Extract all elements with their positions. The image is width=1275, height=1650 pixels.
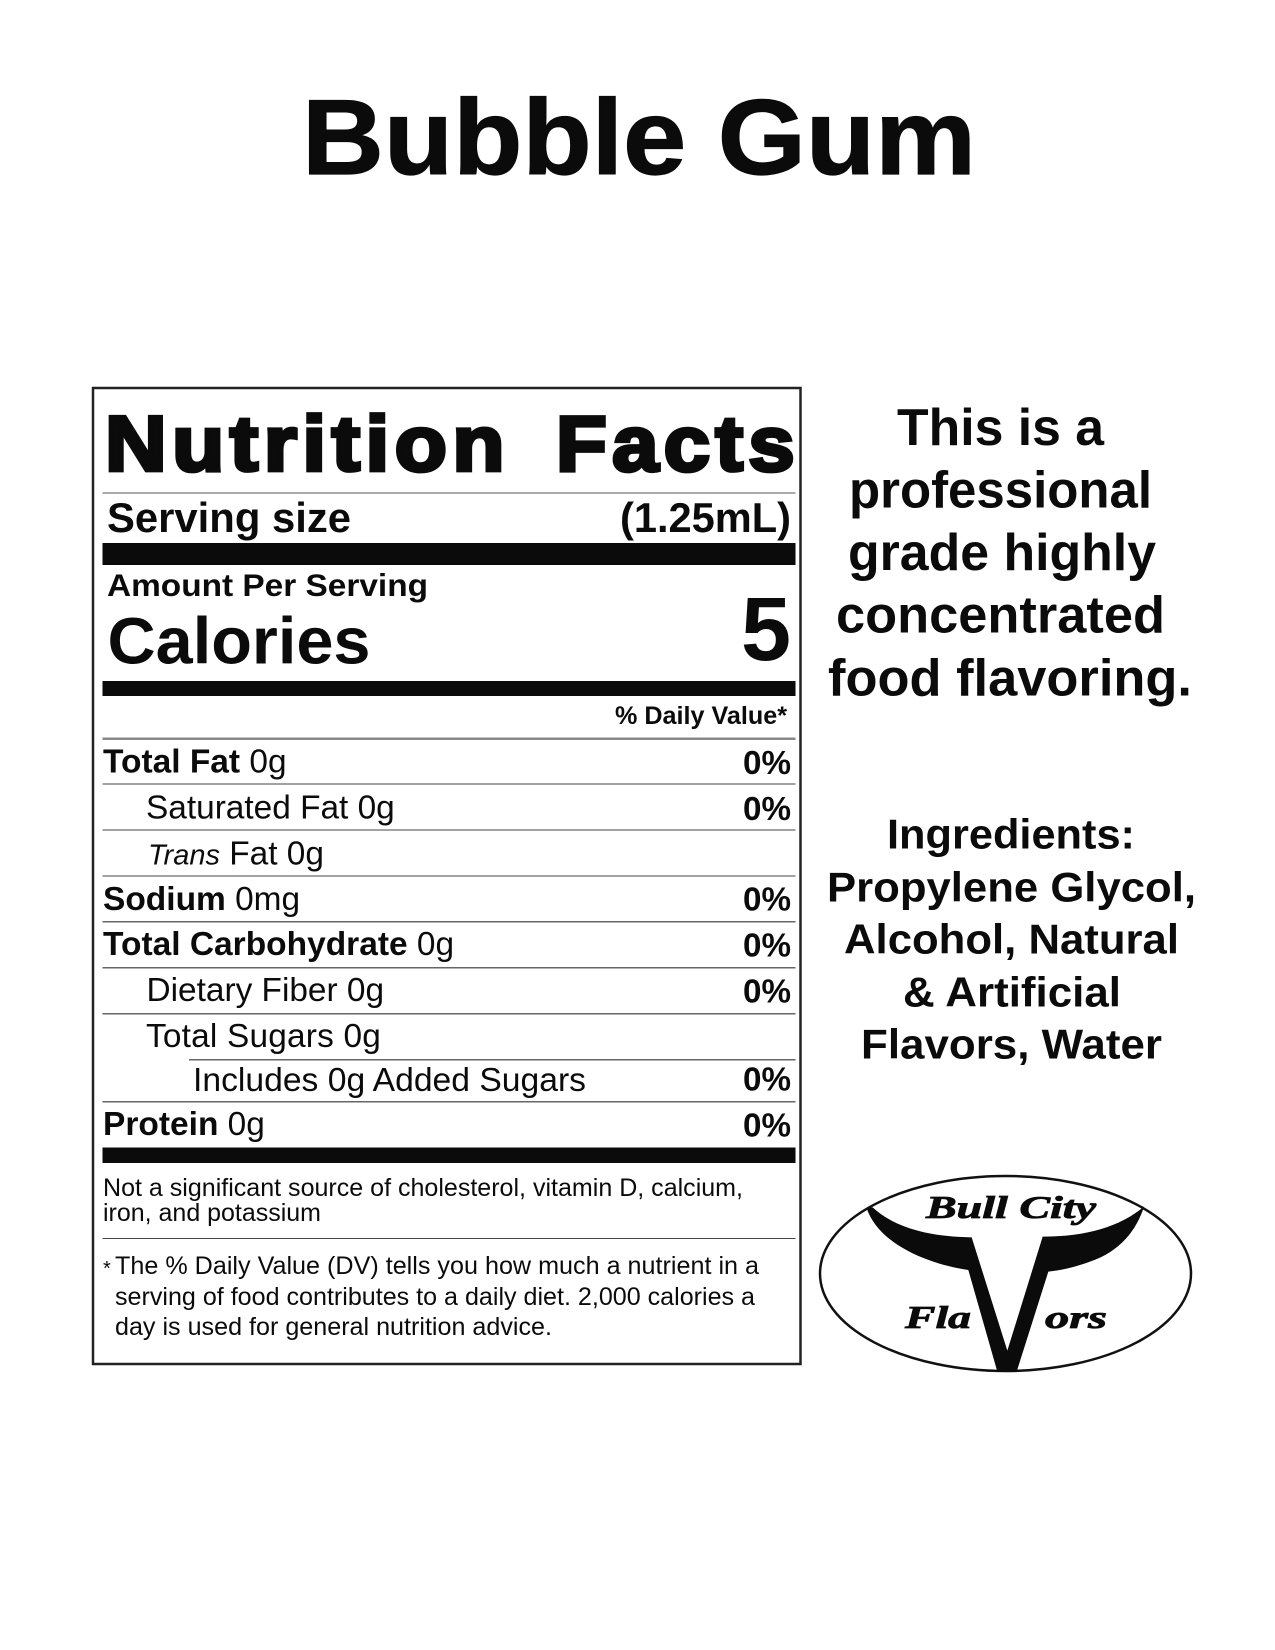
row: dietary fiber: Dietary Fiber 0g (146, 972, 384, 1009)
calories block (107, 567, 791, 680)
text block: professional grade statement: concentrated (836, 586, 1165, 644)
text block: ingredients: Propylene Glycol, (827, 864, 1196, 910)
row: added sugars (193, 1061, 791, 1099)
text block: ingredients: Flavors, Water (861, 1020, 1162, 1068)
row: protein: Protein 0g (103, 1106, 265, 1143)
text block: professional grade statement: grade highly (848, 524, 1156, 582)
text block: daily value footnote: day is used for general nutrition advice. (115, 1313, 552, 1341)
text block: professional grade statement: This is a (897, 399, 1105, 457)
row: trans fat: Trans Fat 0g (148, 836, 324, 872)
text block: professional grade statement: professional (849, 462, 1152, 520)
logo bull horns V (867, 1207, 1144, 1372)
row: total sugars: Total Sugars 0g (146, 1018, 381, 1055)
panel border (93, 388, 800, 1364)
row: added sugars: 0% (743, 1061, 791, 1098)
heading: Nutrition Facts: Facts (556, 400, 800, 488)
text block: daily value footnote (103, 1252, 759, 1341)
logo oval (820, 1176, 1191, 1371)
text block: ingredients (827, 810, 1196, 1068)
row: dietary fiber: 0% (743, 973, 791, 1010)
text block: not a significant source: iron, and potassium (103, 1199, 321, 1227)
title: Bubble Gum (302, 77, 976, 197)
row: protein (103, 1106, 791, 1144)
heading: Nutrition Facts (105, 400, 800, 488)
row: total carbohydrate: 0% (743, 927, 791, 964)
row: saturated fat: 0% (743, 790, 791, 827)
row: saturated fat (146, 790, 791, 827)
row: sodium: Sodium 0mg (103, 881, 300, 918)
text block: daily value footnote: * (103, 1258, 111, 1280)
calories block: Calories (108, 604, 370, 678)
logo text: Bull City (925, 1189, 1097, 1225)
logo text: ors (1045, 1299, 1107, 1335)
panel: nutrition facts label (93, 388, 800, 1364)
text block: ingredients: & Artificial (903, 968, 1121, 1016)
row: added sugars: Includes 0g Added Sugars (193, 1062, 586, 1099)
row: protein: 0% (743, 1107, 791, 1144)
row: sodium (103, 881, 791, 918)
row: sodium: 0% (743, 881, 791, 918)
serving size row: Serving size (107, 494, 351, 541)
row: dietary fiber (146, 972, 791, 1010)
heading: Nutrition Facts: Nutrition (105, 400, 510, 488)
row: total carbohydrate (103, 926, 791, 964)
serving size row (107, 494, 791, 541)
text block: professional grade statement (828, 399, 1192, 708)
row: total fat: 0% (743, 744, 791, 781)
row: total carbohydrate: Total Carbohydrate 0g (103, 926, 454, 963)
text block: ingredients: Alcohol, Natural (844, 916, 1179, 962)
daily value header: % Daily Value* (615, 702, 787, 730)
text block: daily value footnote: The % Daily Value (DV) tells you how much a nutrient in a (115, 1252, 759, 1280)
text block: not a significant source: Not a significant source of cholesterol, vitamin D, calcium, (103, 1174, 743, 1202)
text block: ingredients: Ingredients: (887, 810, 1135, 858)
logo text: Fla (904, 1299, 971, 1335)
text block: not a significant source (103, 1174, 743, 1227)
serving size row: (1.25mL) (620, 494, 791, 541)
text block: daily value footnote: serving of food contributes to a daily diet. 2,000 calories a (115, 1283, 755, 1311)
icon: Bull City Flavors logo (820, 1176, 1191, 1372)
calories block: 5 (741, 580, 791, 680)
calories block: Amount Per Serving (107, 567, 428, 603)
row: saturated fat: Saturated Fat 0g (146, 790, 395, 826)
row: total fat: Total Fat 0g (103, 744, 287, 780)
text block: professional grade statement: food flavoring. (828, 650, 1192, 708)
row: total fat (103, 744, 791, 781)
